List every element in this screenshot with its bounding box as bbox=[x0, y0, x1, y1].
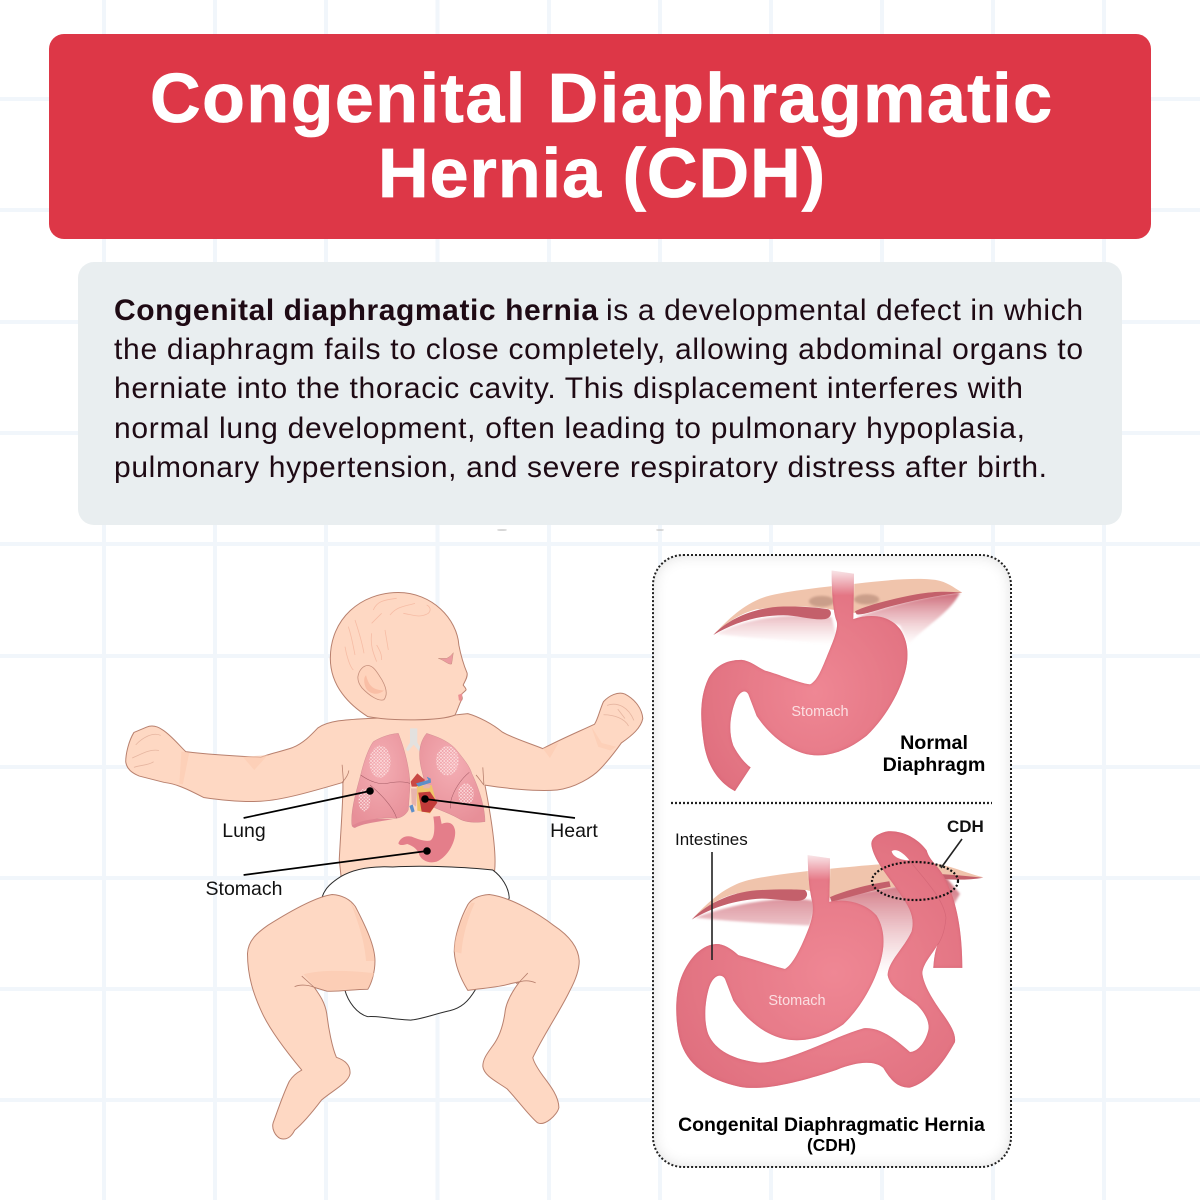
definition paragraph: is a developmental defect in which bbox=[606, 294, 1083, 327]
definition paragraph bbox=[114, 294, 1083, 484]
intestines label with line bbox=[675, 830, 748, 960]
title banner bbox=[49, 34, 1151, 239]
CDH opening ellipse bbox=[872, 862, 958, 900]
definition paragraph: Congenital diaphragmatic hernia bbox=[114, 294, 598, 327]
torso and arms bbox=[126, 693, 643, 876]
trachea bbox=[406, 728, 422, 751]
CDH diagram caption: (CDH) bbox=[807, 1135, 856, 1155]
title: Congenital Diaphragmatic bbox=[150, 59, 1052, 137]
heart bbox=[409, 773, 437, 813]
baby anatomy illustration bbox=[126, 593, 643, 1139]
left leg bbox=[247, 894, 375, 1139]
small stomach bbox=[398, 816, 455, 862]
panel: definition text bbox=[78, 262, 1122, 525]
head bbox=[330, 593, 467, 720]
hair veins and eye bbox=[345, 598, 453, 670]
title bbox=[150, 59, 1052, 212]
stomach and herniated intestines bbox=[676, 831, 962, 1088]
normal diaphragm label: Normal bbox=[900, 732, 968, 754]
ear bbox=[358, 666, 386, 700]
title: Hernia (CDH) bbox=[378, 134, 825, 212]
organ labels: Stomach bbox=[206, 878, 282, 900]
CDH label with line bbox=[941, 817, 984, 868]
normal diaphragm label: Diaphragm bbox=[883, 754, 985, 776]
diaper bbox=[322, 866, 509, 1020]
organ labels bbox=[206, 820, 598, 900]
leader lines and dots bbox=[244, 787, 575, 875]
CDH diagram caption: Congenital Diaphragmatic Hernia bbox=[678, 1114, 985, 1136]
CDH label with line: CDH bbox=[947, 817, 984, 836]
lips bbox=[458, 693, 462, 702]
diagram: normal diaphragm bbox=[701, 570, 962, 791]
right leg bbox=[454, 894, 579, 1123]
panel: normal vs CDH comparison bbox=[653, 555, 1011, 1167]
diagram: CDH bbox=[676, 831, 983, 1088]
definition paragraph: pulmonary hypertension, and severe respiratory distress after birth. bbox=[114, 451, 1047, 484]
right lung bbox=[420, 733, 485, 822]
organ labels: Lung bbox=[222, 820, 266, 842]
left lung bbox=[352, 733, 410, 828]
stomach bbox=[701, 571, 907, 791]
organ labels: Heart bbox=[550, 820, 598, 842]
CDH diagram caption bbox=[678, 1114, 985, 1155]
stomach label: Stomach bbox=[791, 704, 849, 720]
stomach label: Stomach bbox=[768, 993, 826, 1009]
definition paragraph: herniate into the thoracic cavity. This displacement interferes with bbox=[114, 372, 1023, 405]
organs: lungs, trachea, heart, stomach bbox=[352, 728, 485, 862]
definition paragraph: the diaphragm fails to close completely, allowing abdominal organs to bbox=[114, 333, 1083, 366]
intestines label with line: Intestines bbox=[675, 830, 748, 849]
definition paragraph: normal lung development, often leading to pulmonary hypoplasia, bbox=[114, 412, 1025, 445]
normal diaphragm label bbox=[883, 732, 985, 776]
